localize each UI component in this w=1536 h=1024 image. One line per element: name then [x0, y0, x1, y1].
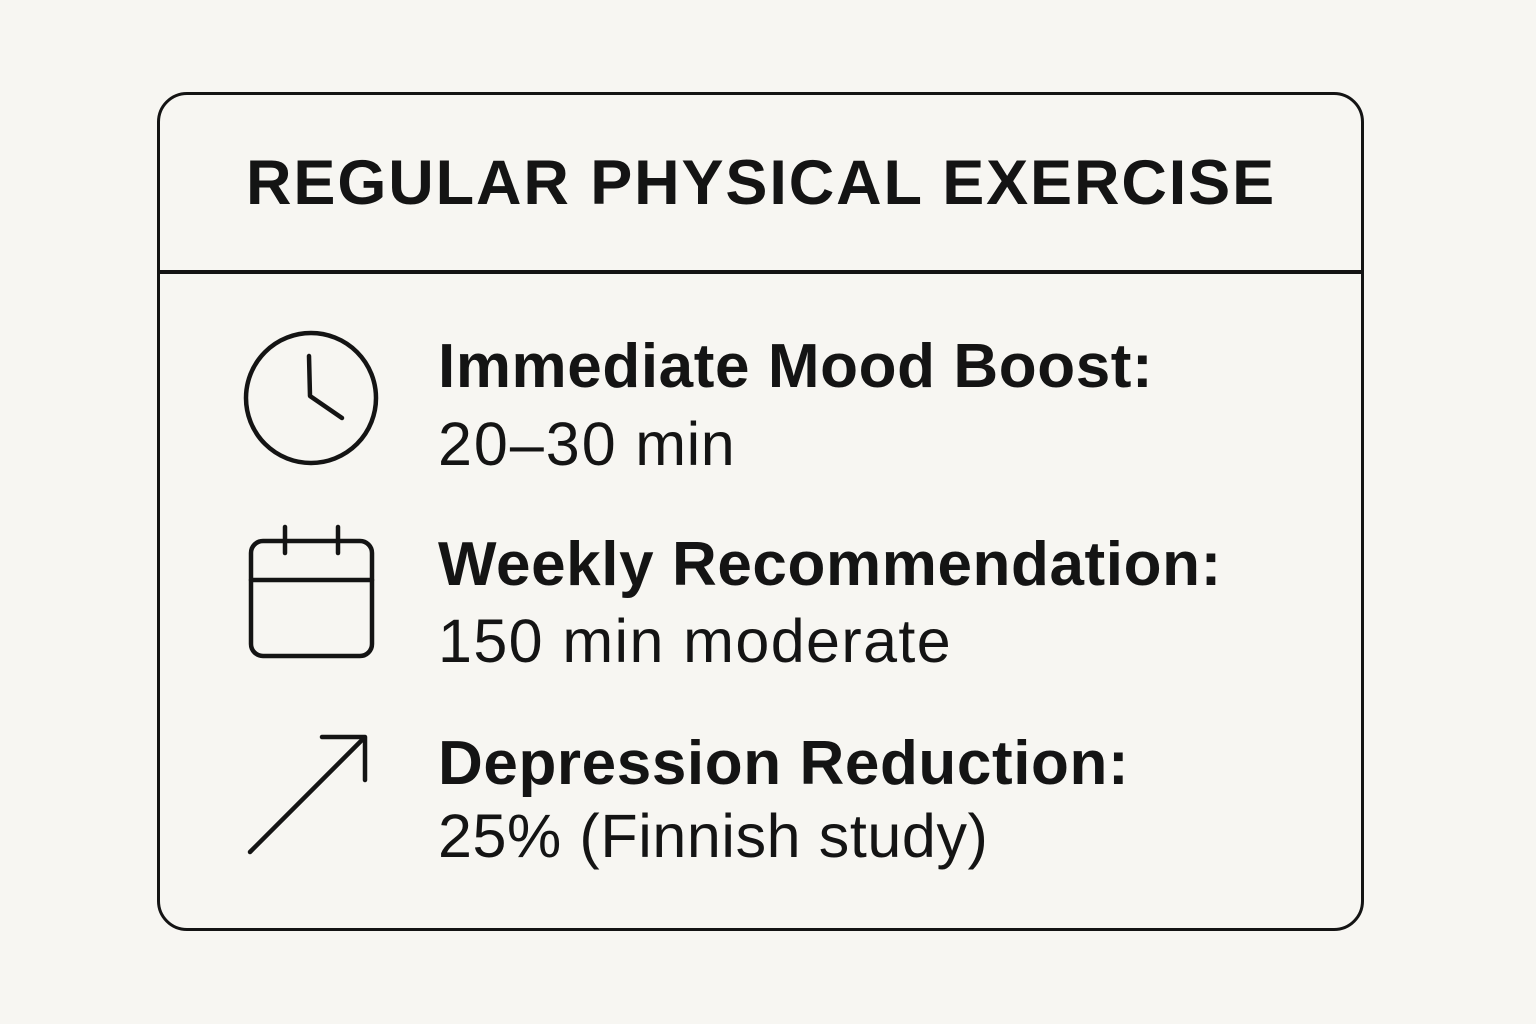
value: 20-30 min: 20–30 min [438, 410, 735, 478]
icon: arrow up-right [250, 737, 365, 852]
icon: calendar [251, 527, 372, 656]
heading: immediate mood boost: Immediate Mood Boost: [438, 332, 1153, 401]
heading: depression reduction: Depression Reduction: [438, 729, 1129, 798]
card panel [157, 92, 1364, 931]
value: 150 min moderate: 150 min moderate [438, 607, 952, 675]
icon: clock [246, 333, 376, 463]
value: 25%: 25% (Finnish study) [438, 802, 988, 870]
heading: weekly recommendation: Weekly Recommendation: [438, 530, 1222, 599]
title: REGULAR PHYSICAL EXERCISE [246, 148, 1276, 218]
